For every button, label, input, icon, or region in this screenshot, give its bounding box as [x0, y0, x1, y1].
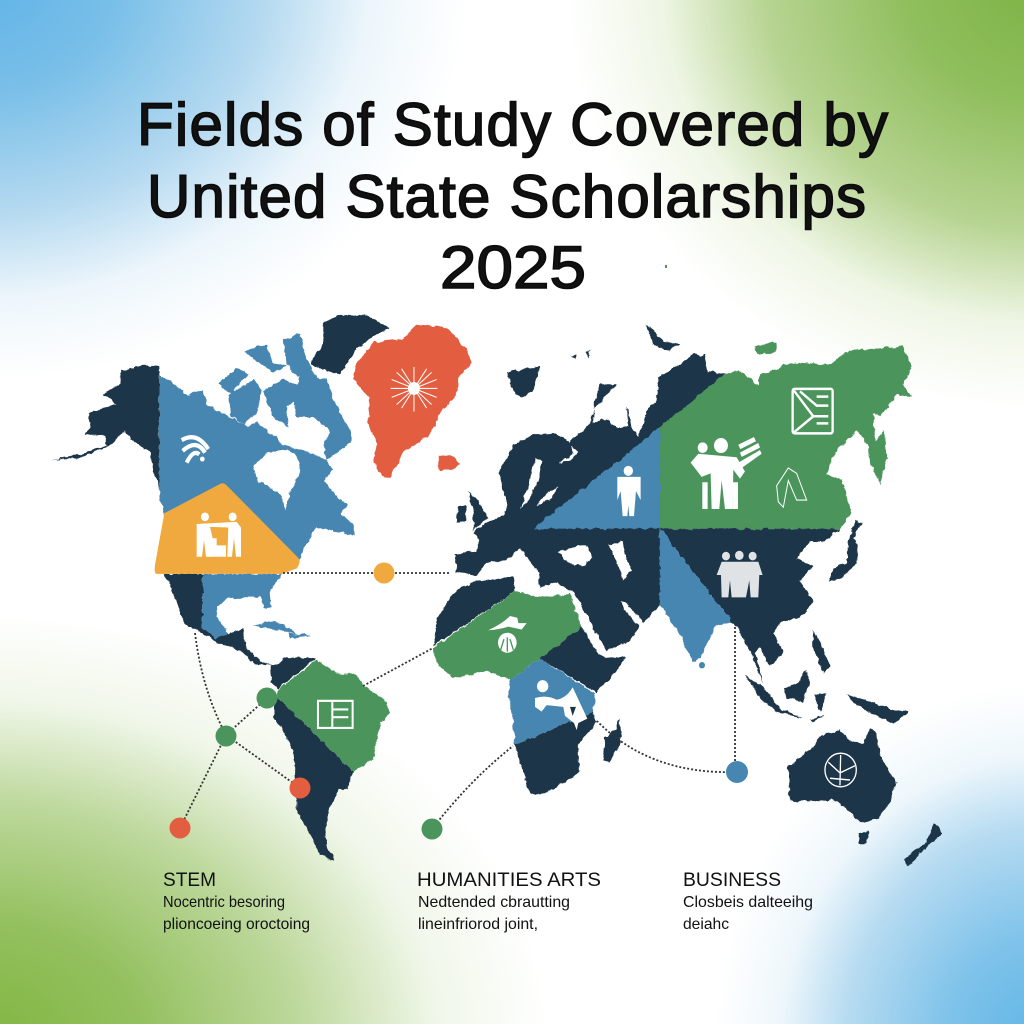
connector lines	[180, 573, 737, 829]
node: green junction	[216, 726, 236, 746]
speck near title	[665, 265, 667, 268]
region: India	[660, 529, 732, 662]
legend: Humanities Arts: Nedtended cbrautting	[418, 894, 570, 911]
region: Arctic islands	[190, 333, 352, 460]
region: blue triangle	[533, 427, 660, 529]
icon: plant and globe	[488, 616, 527, 653]
node: red south america	[290, 778, 310, 798]
node: red STEM	[170, 818, 190, 838]
legend: Business: BUSINESS	[683, 870, 781, 891]
region: Australia	[788, 728, 897, 823]
world map: Eurasia, Africa, Oceania	[433, 324, 942, 866]
legend: Humanities Arts: HUMANITIES ARTS	[417, 870, 601, 891]
region: southern South America	[273, 697, 353, 861]
region: Central Africa	[508, 659, 595, 744]
legend: Business	[683, 870, 813, 933]
region: maritime Southeast Asia	[745, 630, 908, 723]
icon: wifi arcs	[182, 437, 208, 463]
region: North Africa	[433, 577, 515, 646]
region: White Sea	[559, 446, 578, 463]
region: Siberia	[660, 347, 912, 529]
legend: Humanities Arts: lineinfriorod joint,	[418, 916, 538, 933]
region: Iceland	[438, 454, 460, 470]
region: Madagascar	[603, 719, 622, 762]
region: Greenland	[353, 324, 472, 478]
region: Caspian Sea	[608, 541, 632, 580]
region: Gulf of Finland	[537, 486, 558, 505]
icon: group of people with chart	[691, 437, 762, 509]
region: Colombia	[270, 658, 317, 690]
region: USA south-east	[203, 574, 282, 638]
icon: person	[617, 466, 641, 516]
node: blue business	[726, 761, 748, 783]
icon: two people carrying a box	[197, 513, 241, 557]
region: Arctic Eurasian islands	[457, 324, 680, 530]
region: Hudson Bay	[253, 449, 300, 511]
legend: STEM	[163, 870, 310, 933]
legend: Business: Closbeis dalteeihg	[683, 894, 813, 911]
node: green humanities	[422, 818, 442, 840]
region: northern Russia, Europe and Western Asia	[455, 354, 725, 650]
region: China and Southeast Asia	[660, 529, 840, 684]
region: Caribbean islands	[253, 620, 310, 638]
title: 2025	[440, 234, 586, 301]
node: green small	[256, 688, 278, 708]
region: Mexico and Central America	[164, 574, 273, 666]
legend: STEM: Nocentric besoring	[163, 894, 285, 911]
icon: three people	[717, 551, 763, 597]
node: yellow	[374, 562, 394, 584]
region: Adriatic	[520, 548, 538, 574]
icon: outline sketch	[777, 468, 807, 507]
region: Ellesmere island	[310, 315, 390, 374]
region: Gulf of Bothnia	[520, 457, 542, 509]
region: Sahel	[433, 591, 582, 680]
region: Canada and USA north	[159, 374, 355, 560]
region: USA band	[155, 483, 300, 574]
icon: starburst	[391, 367, 437, 412]
region: Wrangel island	[753, 341, 777, 354]
legend: STEM: plioncoeing oroctoing	[163, 916, 310, 933]
icon: figure with shield	[535, 680, 587, 730]
icon: globe	[825, 753, 856, 787]
legend: Business: deiahc	[683, 916, 729, 933]
region: Japan	[828, 520, 862, 582]
world map: Americas	[52, 315, 472, 861]
region: Sri Lanka	[699, 662, 705, 668]
title	[137, 91, 888, 301]
region: Tasmania and New Zealand	[858, 823, 942, 866]
title: United State Scholarships	[147, 163, 866, 230]
legend: Humanities Arts	[417, 870, 601, 933]
region: East Africa	[540, 627, 625, 693]
region: Alaska	[52, 365, 159, 488]
region: Southern Africa	[515, 712, 597, 794]
region: Black Sea	[558, 545, 593, 566]
icon: diagram card	[793, 389, 833, 433]
title: Fields of Study Covered by	[137, 91, 888, 158]
region: Brazil	[277, 659, 390, 772]
legend: STEM: STEM	[163, 870, 216, 891]
icon: document panel	[318, 701, 353, 728]
